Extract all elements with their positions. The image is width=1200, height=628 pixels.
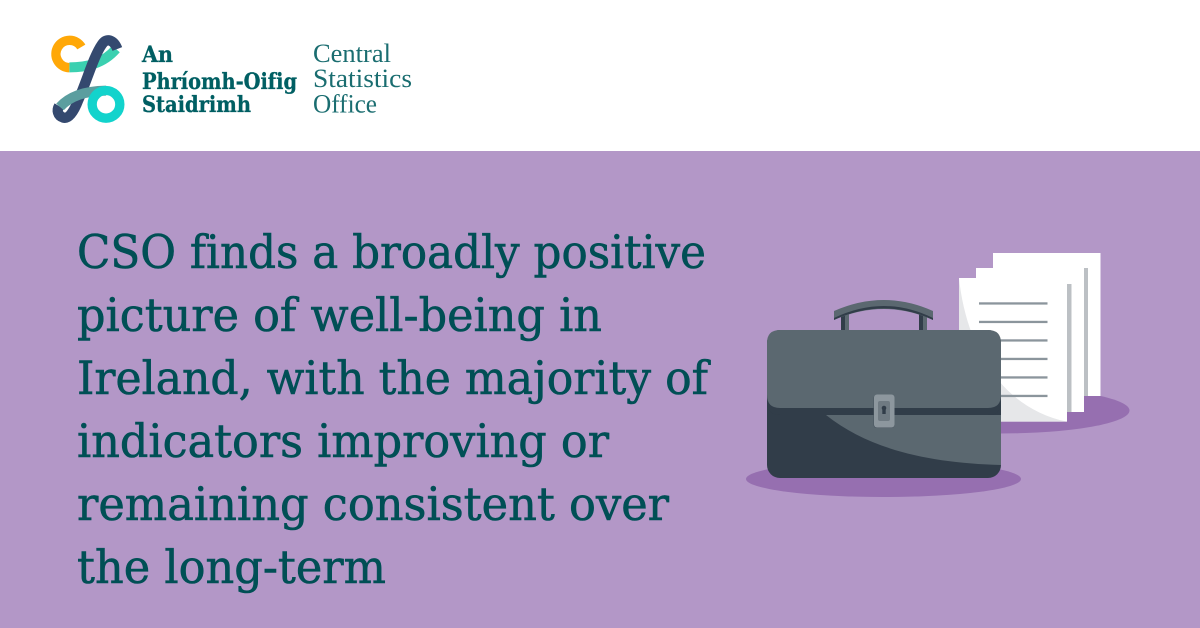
- briefcase shadow: [746, 461, 1021, 497]
- logo text: Irish name: Staidrimh: [142, 92, 251, 118]
- lower highlight: [826, 415, 1001, 465]
- case body: [767, 330, 1001, 478]
- logo text: English name: Office: [313, 90, 377, 118]
- headline: [77, 225, 711, 594]
- illustration: briefcase: [746, 300, 1021, 497]
- headline: remaining consistent over: [77, 477, 669, 531]
- illustration: documents: [870, 253, 1130, 434]
- flap: [767, 330, 1001, 408]
- headline: indicators improving or: [77, 414, 609, 468]
- text lines: [979, 302, 1048, 397]
- flap edge: [767, 395, 1001, 415]
- header band: [0, 0, 1200, 151]
- icon: CSO logo mark: [56, 40, 120, 118]
- documents shadow: [870, 388, 1130, 434]
- headline: picture of well-being in: [77, 288, 602, 342]
- handle: [834, 300, 933, 332]
- logo text: Irish name: Phríomh-Oifig: [142, 69, 297, 95]
- purple panel: [0, 151, 1200, 628]
- headline: Ireland, with the majority of: [77, 351, 711, 405]
- clasp: [874, 394, 894, 428]
- logo text: Irish name: An: [141, 42, 173, 68]
- headline: the long-term: [77, 540, 386, 594]
- logo text: English name: [313, 39, 412, 118]
- front page: [959, 278, 1072, 422]
- logo text: English name: Statistics: [313, 64, 412, 93]
- back page: [993, 253, 1100, 396]
- logo text: English name: Central: [313, 39, 391, 68]
- middle page: [976, 268, 1088, 412]
- logo text: Irish name: [141, 42, 297, 118]
- headline: CSO finds a broadly positive: [77, 225, 706, 279]
